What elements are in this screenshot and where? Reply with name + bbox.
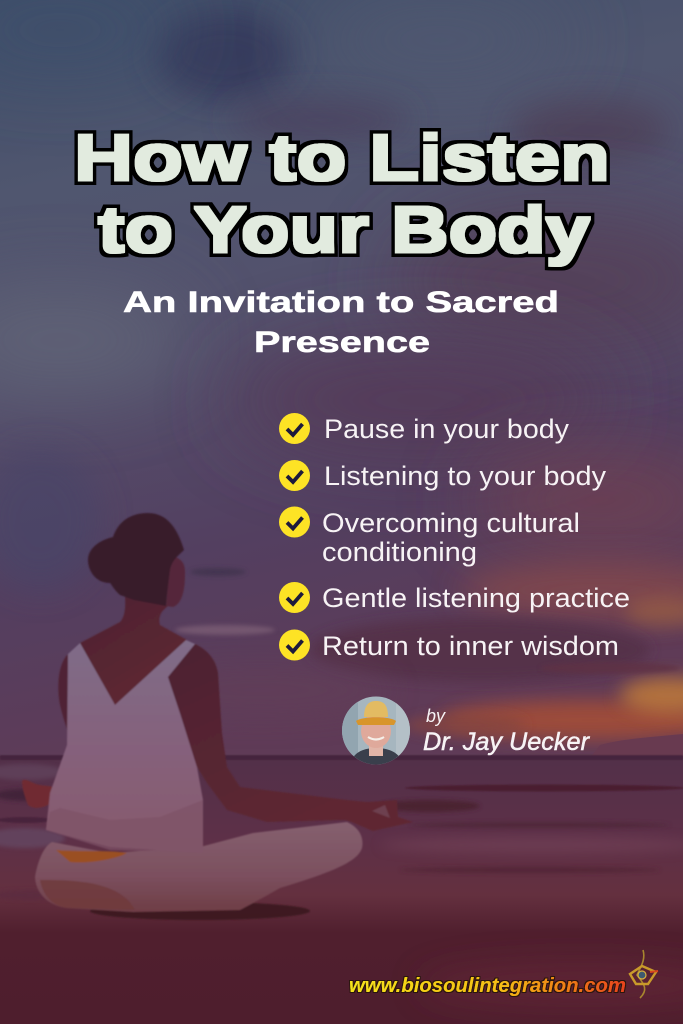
author portrait [342,696,410,766]
item: Overcoming cultural conditioning: conditioning [322,537,477,567]
neck and back [80,596,187,705]
tank top [46,640,203,853]
author byline: Dr. Jay Uecker [423,728,591,756]
website url: www.biosoulintegration.com [349,975,626,997]
item: Return to inner wisdom: Return to inner wisdom [322,631,619,661]
left hand [22,780,55,808]
subtitle: An Invitation to Sacred [123,286,559,319]
subtitle: Presence [254,326,430,359]
right arm and hand [168,644,413,831]
item: Pause in your body: Pause in your body [324,414,570,444]
waist skin gap [56,850,127,863]
title: How to Listen [74,121,610,194]
figure: woman meditating seen from behind [22,513,413,920]
title: to Your Body [98,193,590,266]
distant hill [590,734,683,758]
title [74,121,610,266]
checklist [279,413,630,661]
head and hair [88,513,184,606]
item: Listening to your body: Listening to your body [324,461,607,491]
item: Gentle listening practice: Gentle listening practice [322,583,630,613]
subtitle [123,286,559,359]
author byline: by [426,706,446,726]
pants [35,822,362,912]
author byline [423,706,591,756]
item: Overcoming cultural conditioning: Overcoming cultural [322,508,580,538]
figure shadow on sand [90,902,310,920]
icon: eye compass logo [630,950,658,998]
left arm [58,654,78,745]
item: Overcoming cultural conditioning [279,506,580,567]
face sliver [166,556,185,607]
